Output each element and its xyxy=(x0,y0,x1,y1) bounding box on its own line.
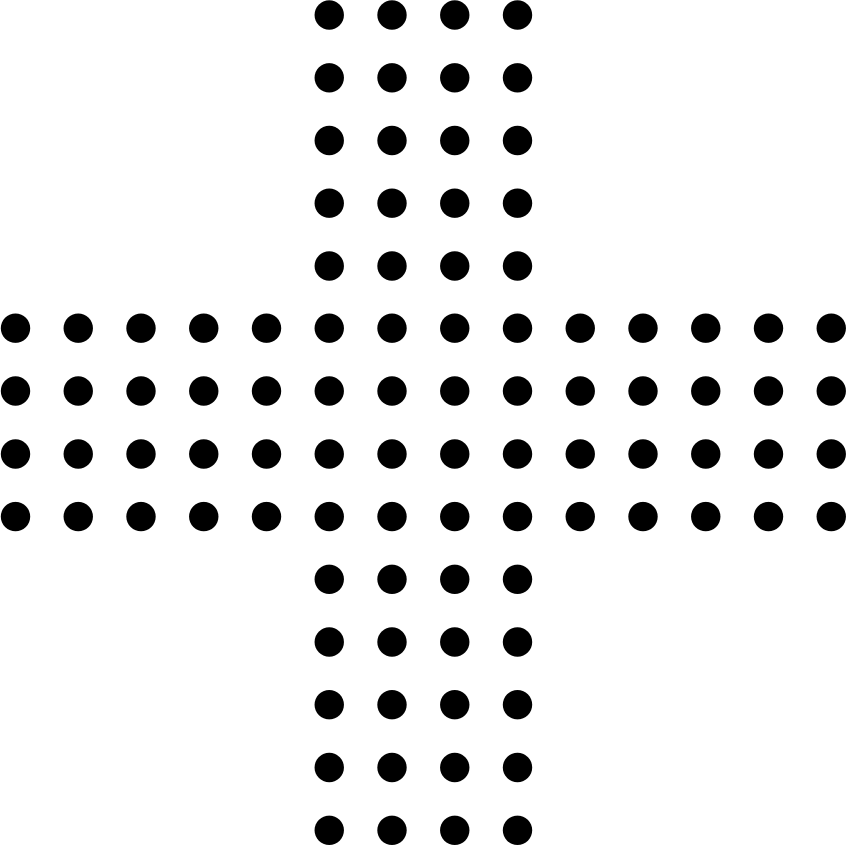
top arm of cross xyxy=(315,0,532,281)
horizontal band of cross xyxy=(1,314,846,531)
bottom arm of cross xyxy=(315,565,532,845)
